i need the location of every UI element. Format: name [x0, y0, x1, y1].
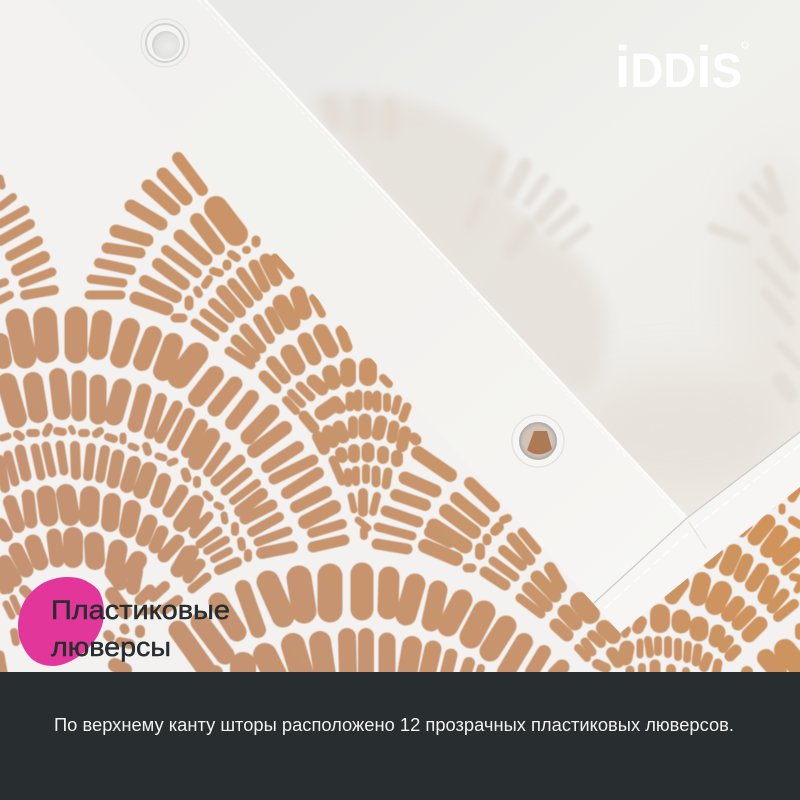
ghost: soft shadow blobs — [336, 94, 782, 480]
heading: люверсы — [51, 632, 171, 662]
fan: upper centre, outer rows — [89, 158, 256, 318]
fan: fourth and fifth rows — [0, 494, 207, 589]
fan: upper centre, middle rows — [195, 258, 389, 411]
caption text: По верхнему канту шторы расположено 12 прозрачных пластиковых люверсов. — [54, 715, 734, 735]
fan: lower-right tail of second row — [194, 436, 450, 542]
lower layer hem and folded edge — [47, 0, 800, 633]
logo: registered mark — [742, 42, 748, 48]
fan: lower-right corner — [612, 488, 800, 675]
eyelet: lower grommet — [512, 415, 564, 467]
fan: right of centre — [377, 453, 613, 668]
heading: Пластиковые — [51, 595, 230, 625]
fan: large lower-left, two outer rows — [0, 318, 344, 553]
fan: around the pink blob — [0, 572, 178, 672]
stitched seams on the hem — [198, 0, 800, 608]
bottom caption bar — [0, 672, 800, 800]
fan: lower centre, bottom row — [215, 636, 481, 675]
logo: iDDiS — [615, 35, 742, 100]
fan: top-left edge — [0, 178, 54, 300]
fan: lower centre, outer row — [178, 574, 562, 674]
ghost: blurred top petals — [332, 120, 534, 231]
fan: third row of thin petals — [0, 445, 237, 590]
eyelet: top grommet — [141, 19, 189, 67]
pink accent blob — [18, 577, 104, 666]
ghost pattern seen through the sheet — [315, 93, 800, 490]
fan: upper centre, inner rows to the apex — [304, 394, 416, 536]
fan: row of small beads — [2, 427, 248, 558]
heading — [51, 595, 230, 662]
ghost: visible petals — [510, 165, 800, 395]
scallop pattern on the fabric — [0, 158, 800, 675]
upper curtain sheet — [205, 0, 800, 518]
